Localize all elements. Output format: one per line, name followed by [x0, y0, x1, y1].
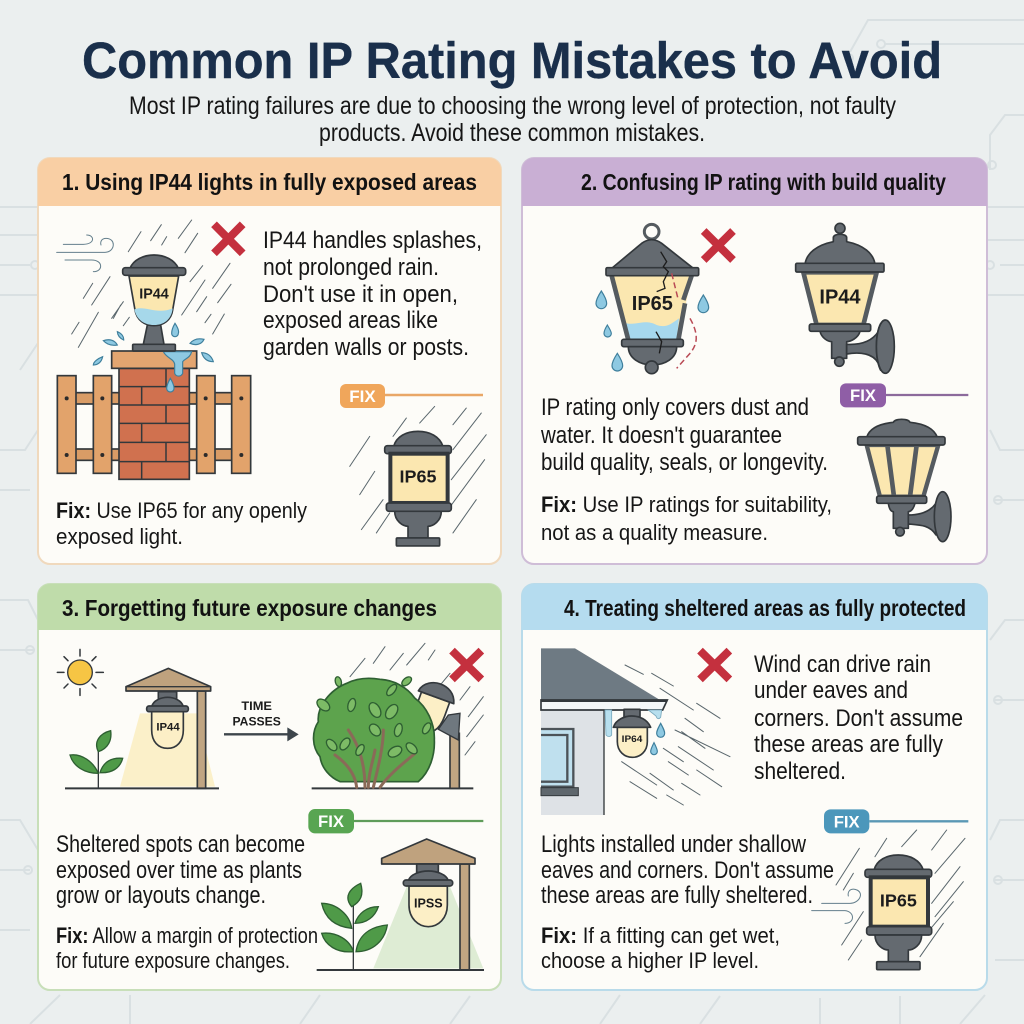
- panel: mistake 1: [38, 158, 501, 564]
- panel 3 text: exposed over time as plants: [56, 857, 302, 884]
- panel 3 text: for future exposure changes.: [56, 948, 290, 973]
- panel 2 fix badge: FIX: [850, 386, 876, 405]
- panel 3 header: [38, 584, 501, 630]
- panel 4 text top: these areas are fully: [754, 731, 944, 758]
- panel 1 fix text: Fix: Use IP65 for any openly: [56, 498, 308, 523]
- panel 4 text bottom: eaves and corners. Don't assume: [541, 857, 834, 884]
- sheltered IP44 light: IP44: [156, 722, 180, 734]
- panel 3 text: [56, 831, 318, 973]
- panel 4 text top: [754, 651, 963, 785]
- subtitle: [129, 92, 896, 147]
- cracked IP65 lantern: IP65: [632, 293, 673, 315]
- panel 3 fix badge: [308, 809, 483, 833]
- panel 3 fix badge: FIX: [318, 812, 344, 831]
- panel 2 text: [540, 394, 832, 545]
- panel 1 header: [38, 158, 501, 206]
- title: Common IP Rating Mistakes to Avoid: [82, 32, 942, 89]
- overgrown bush hiding light in rain: [312, 643, 483, 788]
- panel 2 text: Fix: Use IP ratings for suitability,: [541, 492, 832, 517]
- arrow: time passes: PASSES: [232, 715, 281, 729]
- icon: IP65 post light in rain: IP65: [400, 467, 436, 487]
- house eave with IP64 light: IP64: [622, 734, 642, 744]
- icon: IP65 post light with wind and rain: [812, 830, 965, 970]
- arrow: time passes: TIME: [241, 699, 272, 713]
- panel 1 body text: Don't use it in open,: [263, 281, 458, 308]
- house eave with IP64 light: [541, 648, 730, 815]
- fix lamp: [858, 419, 951, 542]
- panel 1 body text: IP44 handles splashes,: [263, 227, 482, 254]
- panel 3 text: Fix: Allow a margin of protection: [56, 923, 318, 948]
- sheltered IP44 light: [65, 668, 219, 788]
- arrow: time passes: [224, 699, 299, 741]
- panel 1 heading: 1. Using IP44 lights in fully exposed areas: [62, 169, 477, 195]
- panel 2 fix badge: [840, 383, 968, 407]
- subtitle: Most IP rating failures are due to choosing the wrong level of protection, not faulty: [129, 92, 896, 120]
- panel 4 text top: under eaves and: [754, 677, 908, 704]
- rails: [57, 376, 251, 473]
- fix illustration: IPSS: [414, 897, 443, 911]
- panel 3 text: grow or layouts change.: [56, 882, 266, 909]
- panel 4 text bottom: Fix: If a fitting can get wet,: [541, 923, 780, 948]
- panel: mistake 2: [522, 158, 987, 564]
- illustrations: eaves and sheltered light: [541, 648, 968, 970]
- IP44 wall lantern: [796, 223, 894, 373]
- panel: mistake 4: [522, 584, 987, 990]
- fix illustration: [317, 839, 484, 970]
- panel 1 body text: exposed areas like: [263, 307, 438, 334]
- panel 1 fix badge: FIX: [349, 387, 376, 406]
- illustration: IP44 light on brick fence post: [57, 220, 251, 479]
- panel 2 text: not as a quality measure.: [541, 520, 768, 545]
- subtitle: products. Avoid these common mistakes.: [319, 119, 705, 147]
- panel 4 text bottom: [541, 831, 834, 973]
- panel 4 text bottom: choose a higher IP level.: [541, 948, 759, 973]
- panel 4 fix badge: FIX: [834, 812, 860, 831]
- lamp: [143, 325, 164, 344]
- panel 1 fix text: [56, 498, 308, 549]
- panel 4 header: [522, 584, 987, 630]
- illustrations: plant growth over time: [57, 643, 484, 970]
- panel 1 body text: not prolonged rain.: [263, 254, 439, 281]
- panel 2 heading: 2. Confusing IP rating with build quality: [581, 169, 946, 195]
- panel 4 text top: Wind can drive rain: [754, 651, 931, 678]
- bricks: [119, 368, 189, 479]
- panel: mistake 3: [38, 584, 501, 990]
- cracked IP65 lantern: [596, 224, 709, 374]
- illustrations: lanterns: [596, 223, 968, 542]
- panel 1 fix text: exposed light.: [56, 524, 183, 549]
- panel 3 heading: 3. Forgetting future exposure changes: [62, 595, 437, 621]
- illustration: IP44 light on brick fence post: IP44: [139, 287, 169, 303]
- panel 2 header: [522, 158, 987, 206]
- panel 4 text bottom: Lights installed under shallow: [541, 831, 806, 858]
- panel 4 text top: corners. Don't assume: [754, 705, 963, 732]
- IP44 wall lantern: IP44: [819, 287, 861, 309]
- panel 2 text: water. It doesn't guarantee: [540, 422, 782, 449]
- icon: IP65 post light in rain: [350, 406, 486, 546]
- panel 1 body text: [263, 227, 482, 361]
- panel 4 fix badge: [824, 809, 968, 833]
- panel 4 text bottom: these areas are fully sheltered.: [541, 882, 813, 909]
- panel 4 text top: sheltered.: [754, 758, 846, 785]
- panel 2 text: build quality, seals, or longevity.: [541, 449, 828, 476]
- icon: sun: [57, 649, 103, 695]
- panel 1 fix badge: [340, 384, 483, 408]
- icon: IP65 post light with wind and rain: IP65: [880, 890, 917, 910]
- panel 3 text: Sheltered spots can become: [56, 831, 305, 858]
- panel 1 body text: garden walls or posts.: [263, 334, 469, 361]
- panel 2 text: IP rating only covers dust and: [541, 394, 809, 421]
